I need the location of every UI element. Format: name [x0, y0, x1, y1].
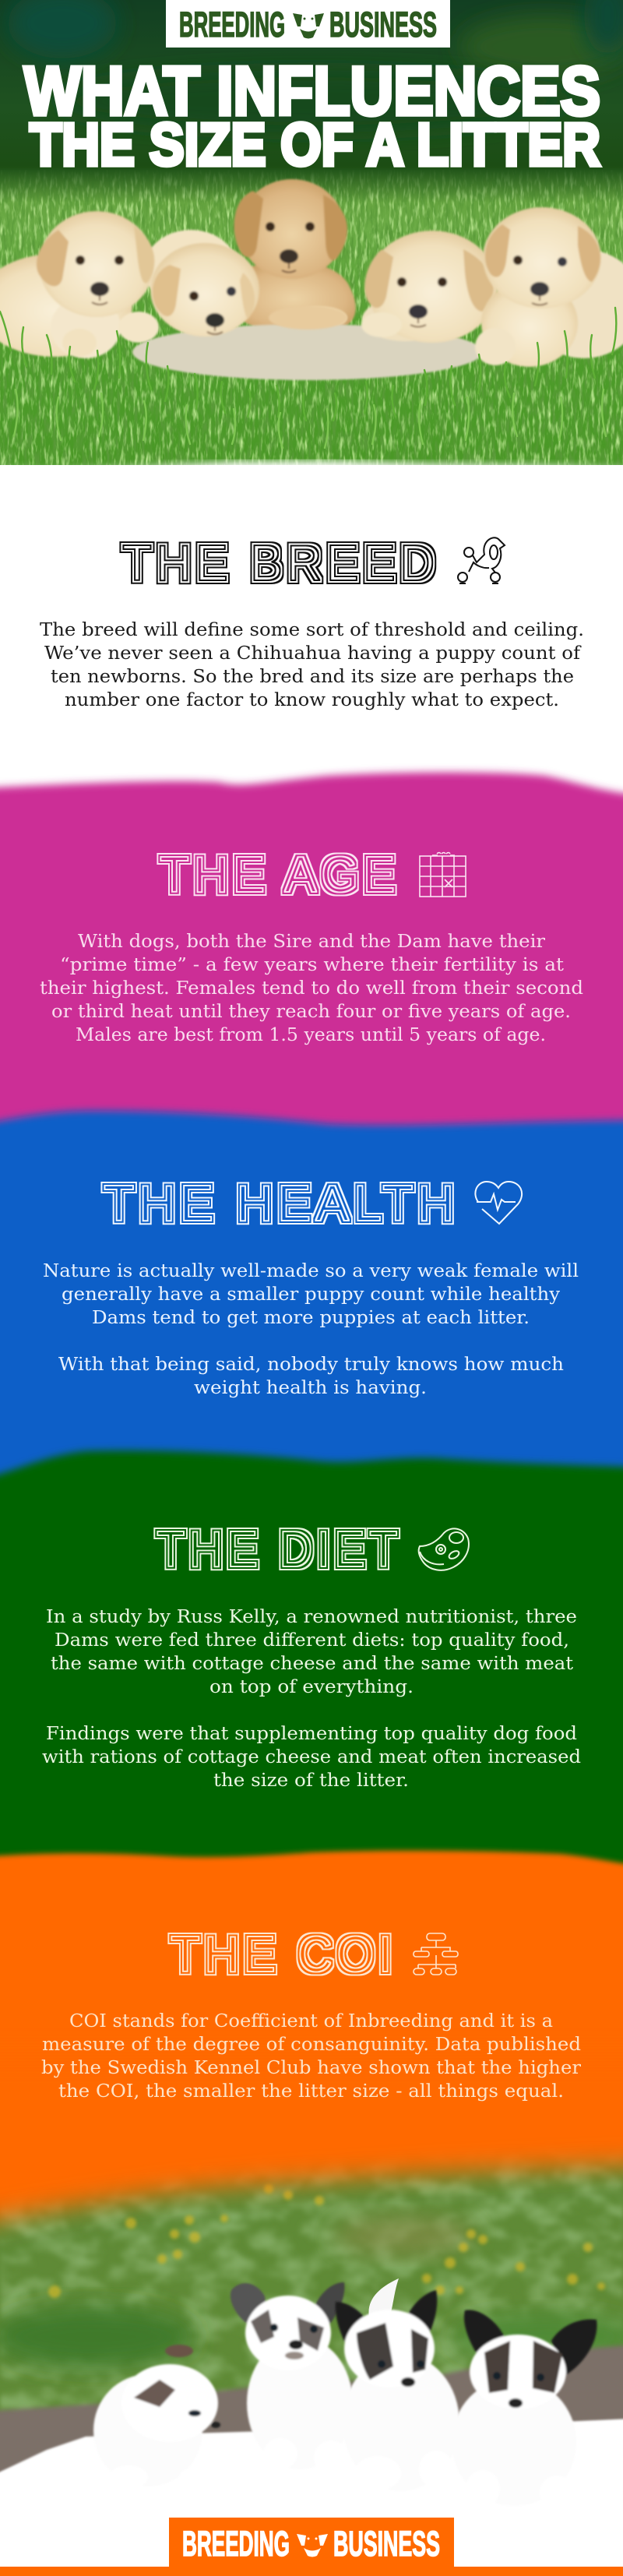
- text: age description: [40, 932, 583, 1045]
- puppy: papillon tail: [368, 2278, 399, 2321]
- text: diet description: on top of everything.: [209, 1677, 414, 1697]
- panel: footer photo: [0, 2056, 623, 2576]
- blue background: [0, 1111, 623, 1496]
- logo dog icon: [293, 13, 324, 39]
- logo wordmark left: BREEDING: [182, 2524, 290, 2564]
- text: diet description: the same with cottage cheese and the same with meat: [51, 1654, 574, 1674]
- white blanket: [0, 2419, 623, 2576]
- icon: pedigree chart: [414, 1933, 458, 1975]
- puppy: papillon fourth: [452, 2310, 597, 2510]
- heading: the health: THE HEALTH: [104, 1175, 459, 1232]
- pink background: [0, 773, 623, 1153]
- icon: heart pulse: [475, 1182, 522, 1224]
- text: health description: weight health is having.: [194, 1378, 427, 1398]
- text: breed description: ten newborns. So the bred and its size are perhaps the: [51, 667, 574, 687]
- text: health description: With that being said, nobody truly knows how much: [58, 1355, 564, 1375]
- meadow background: [0, 2134, 623, 2446]
- text: age description: or third heat until they reach four or five years of age.: [51, 1002, 571, 1022]
- text: age description: Males are best from 1.5 years until 5 years of age.: [76, 1025, 546, 1045]
- heading: the age: THE AGE: [160, 846, 399, 903]
- text: diet description: Findings were that supplementing top quality dog food: [46, 1724, 577, 1744]
- puppy: cream labrador right: [475, 207, 623, 367]
- puppy: tan paw: [269, 306, 347, 329]
- forest background: [0, 0, 623, 195]
- panel: the coi: [0, 1851, 623, 2181]
- puppy: papillon facing right: [93, 2345, 220, 2489]
- heading: the diet: THE DIET: [157, 1521, 402, 1577]
- text: breed description: [40, 620, 584, 710]
- text: coi description: the COI, the smaller the litter size - all things equal.: [58, 2081, 564, 2102]
- panel: the breed: [40, 534, 584, 710]
- logo wordmark right: BUSINESS: [329, 5, 437, 44]
- grass lawn: [0, 168, 623, 465]
- text: diet description: the size of the litter.: [213, 1771, 409, 1791]
- text: health description: Dams tend to get more puppies at each litter.: [92, 1308, 530, 1328]
- puppy: tan labrador back centre: [232, 179, 356, 329]
- text: age description: “prime time” - a few years where their fertility is at: [60, 955, 565, 975]
- logo: top Breeding Business: [166, 0, 450, 48]
- dandelions: [48, 2160, 605, 2298]
- puppy: papillon second: [231, 2282, 353, 2475]
- icon: calendar: [420, 852, 466, 897]
- text: health description: generally have a smaller puppy count while healthy: [62, 1284, 560, 1305]
- text: health description: [43, 1261, 579, 1398]
- coi content: [41, 1926, 581, 2102]
- text: age description: With dogs, both the Sire and the Dam have their: [78, 932, 545, 952]
- heading: the breed: THE BREED: [122, 534, 439, 591]
- orange bottom strip: [0, 2567, 623, 2576]
- text: breed description: number one factor to know roughly what to expect.: [65, 690, 559, 710]
- text: diet description: with rations of cottage cheese and meat often increased: [42, 1747, 581, 1767]
- puppy: cream labrador left, body behind: [0, 211, 238, 358]
- icon: steak: [419, 1528, 469, 1570]
- logo dog icon: [297, 2534, 328, 2557]
- orange fade over meadow: [0, 2056, 623, 2224]
- logo: bottom Breeding Business: [169, 2518, 454, 2576]
- text: diet description: In a study by Russ Kelly, a renowned nutritionist, three: [46, 1607, 577, 1627]
- logo wordmark left: BREEDING: [179, 5, 285, 44]
- logo wordmark right: BUSINESS: [333, 2524, 440, 2564]
- text: coi description: measure of the degree of consanguinity. Data published: [42, 2035, 581, 2055]
- text: health description: Nature is actually well-made so a very weak female will: [43, 1261, 579, 1281]
- text: breed description: The breed will define some sort of threshold and ceiling.: [40, 620, 584, 640]
- panel: header photo: [0, 0, 623, 499]
- puppy: papillon third: [336, 2290, 459, 2491]
- text: age description: their highest. Females tend to do well from their second: [40, 978, 583, 999]
- text: diet description: Dams were fed three different diets: top quality food,: [55, 1630, 569, 1651]
- text: diet description: [42, 1607, 581, 1791]
- text: coi description: by the Swedish Kennel Club have shown that the higher: [41, 2058, 581, 2078]
- panel: the age: [0, 773, 623, 1153]
- heading: the coi: THE COI: [171, 1926, 396, 1982]
- road: [0, 2345, 623, 2477]
- white torn fade under the photo: [0, 461, 623, 499]
- foreground grass blades: [0, 308, 616, 448]
- stepping stone: [132, 324, 483, 380]
- panel: the health: [0, 1111, 623, 1496]
- text: coi description: COI stands for Coefficient of Inbreeding and it is a: [69, 2011, 553, 2032]
- text: breed description: We’ve never seen a Chihuahua having a puppy count of: [44, 643, 582, 664]
- text: coi description: [41, 2011, 581, 2102]
- green background: [0, 1450, 623, 1885]
- orange background: [0, 1851, 623, 2181]
- puppy: cream labrador fourth: [361, 231, 498, 343]
- icon: poodle: [458, 537, 505, 583]
- panel: the diet: [0, 1450, 623, 1885]
- puppy: cream labrador second: [150, 243, 259, 337]
- title: [24, 52, 600, 178]
